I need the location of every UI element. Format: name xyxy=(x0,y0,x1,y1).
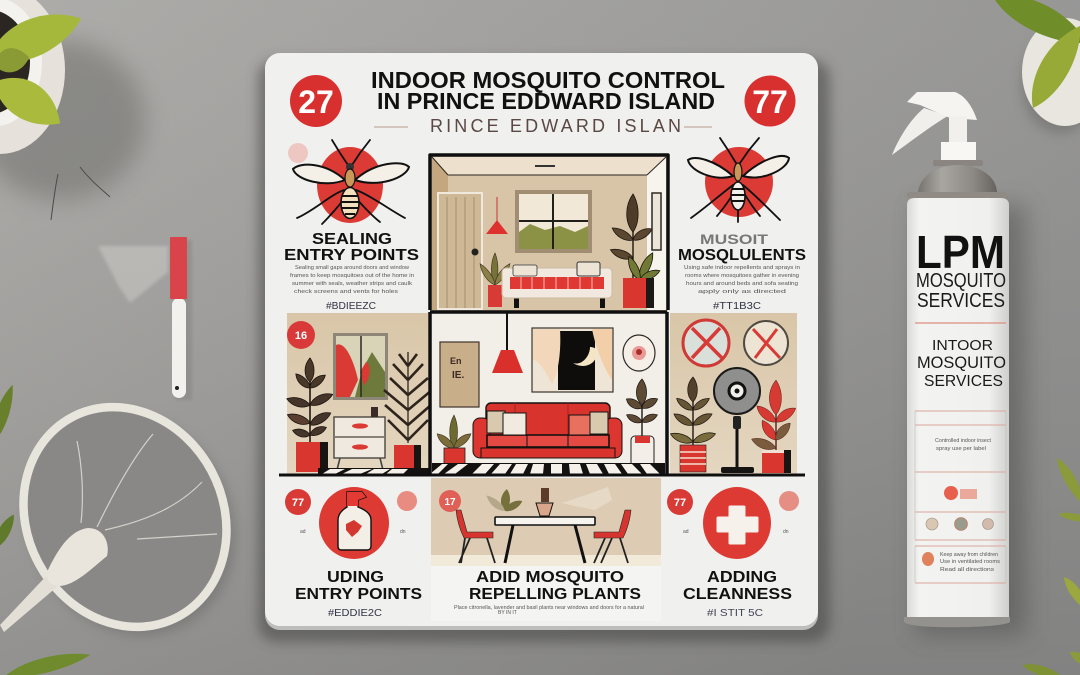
wall shadow behind top left pot xyxy=(0,40,145,200)
panel: bottom left repellent bottle: ad xyxy=(300,529,306,535)
faded dot xyxy=(288,143,308,163)
product text xyxy=(917,337,1006,390)
badge xyxy=(439,490,461,512)
text block: adding cleanness: #I STIT 5C xyxy=(707,608,763,619)
can fine print: spray use per label xyxy=(936,446,986,452)
round icons xyxy=(926,518,994,530)
poster: En xyxy=(450,356,462,366)
panel: bottom right cleanness: dn xyxy=(783,529,789,535)
title xyxy=(371,67,725,114)
text block: adding cleanness: CLEANNESS xyxy=(683,586,792,603)
table with pot xyxy=(495,488,595,563)
subtitle with rules: RINCE EDWARD ISLAN xyxy=(430,116,681,136)
spray mist xyxy=(98,246,168,303)
text block: mosquito repellents: #TT1B3C xyxy=(713,301,761,312)
leafy plant with striped pot xyxy=(669,377,717,472)
product text: SERVICES xyxy=(924,373,1003,390)
brand text xyxy=(916,226,1006,312)
plant pot top left xyxy=(0,0,88,154)
product text: MOSQUITO xyxy=(917,353,1006,372)
poster card xyxy=(258,53,830,642)
brand text: LPM xyxy=(916,226,1005,278)
icon: mosquito left xyxy=(293,140,409,224)
wall sketch xyxy=(562,487,612,510)
faded badge xyxy=(779,491,799,511)
panel: right lower room xyxy=(669,313,798,474)
text block: add mosquito repelling plants: ADID MOSQUITO xyxy=(476,569,624,586)
number badge left xyxy=(290,75,342,127)
framed picture xyxy=(652,193,661,250)
product text: INTOOR xyxy=(932,337,993,354)
ceiling xyxy=(432,157,666,175)
text block: sealing entry points: SEALING xyxy=(312,231,392,248)
wall plate xyxy=(623,335,655,371)
bottom rim xyxy=(904,617,1010,627)
plant xyxy=(286,358,334,472)
text block: sealing entry points: check screens and vents for holes xyxy=(294,289,399,295)
plant pot top right xyxy=(987,0,1080,133)
dresser xyxy=(334,407,385,470)
panel: upper room illustration xyxy=(430,155,668,312)
panel: bottom right cleanness xyxy=(667,487,799,559)
bottom label panel: Keep away from children xyxy=(940,552,998,558)
text block: mosquito repellents: apply only as directed xyxy=(698,289,786,295)
text block: mosquito repellents: MOSQLULENTS xyxy=(678,247,806,264)
brand text: MOSQUITO xyxy=(916,270,1006,292)
text block: sealing entry points: Sealing small gaps around doors and window xyxy=(295,265,409,271)
can label details xyxy=(915,411,1006,583)
door xyxy=(438,193,482,309)
text block: mosquito repellents: hours and around beds and sofa seating xyxy=(686,281,798,287)
bottom label panel: Read all directions xyxy=(940,567,995,573)
big plant xyxy=(609,194,661,308)
potted plant right xyxy=(624,379,659,467)
text block: sealing entry points: summer with seals, weather strips and caulk xyxy=(292,281,413,287)
red seal xyxy=(944,486,977,500)
panel: bottom centre dining scene xyxy=(431,478,661,621)
right chair xyxy=(594,510,631,563)
pendant lamp xyxy=(492,312,523,373)
text block: uding entry points: #EDDIE2C xyxy=(328,608,382,619)
wall lamp xyxy=(486,197,508,234)
icon: mosquito right xyxy=(688,138,789,222)
fly swatter xyxy=(0,371,273,672)
poster xyxy=(440,342,479,407)
title: IN PRINCE EDDWARD ISLAND xyxy=(377,88,715,114)
can fine print xyxy=(935,438,992,452)
text block: add mosquito repelling plants: BY IN IT xyxy=(498,610,517,616)
no-mosquito sign 2 xyxy=(744,321,788,365)
small plant xyxy=(477,253,512,307)
sofa xyxy=(502,262,612,308)
badge: 77 xyxy=(674,497,686,509)
panel: bottom left repellent bottle xyxy=(285,487,417,559)
text block: add mosquito repelling plants: Place citronella, lavender and basil plants near windows and doors for a natural xyxy=(454,605,644,611)
number badge left: 27 xyxy=(298,84,334,120)
panel: centre lower room xyxy=(430,312,667,474)
text block: mosquito repellents: rooms where mosquitoes gather in evening xyxy=(685,273,799,279)
night window with curtains xyxy=(532,328,613,392)
text block: sealing entry points: #BDIEEZC xyxy=(326,301,376,312)
text block: uding entry points xyxy=(295,569,422,619)
text block: sealing entry points: ENTRY POINTS xyxy=(284,247,419,264)
window xyxy=(515,190,592,253)
spray can xyxy=(892,92,1026,635)
badge: 17 xyxy=(444,497,456,508)
can fine print: Controlled indoor insect xyxy=(935,438,992,444)
text block: add mosquito repelling plants xyxy=(454,569,644,616)
text block: mosquito repellents: MUSOIT xyxy=(700,231,769,247)
floor line xyxy=(279,474,805,476)
left edge leaves xyxy=(0,383,92,675)
text block: uding entry points: ENTRY POINTS xyxy=(295,586,422,603)
dome xyxy=(907,160,1007,198)
text block: mosquito repellents: Using safe indoor repellents and sprays in xyxy=(684,265,800,271)
panel: left lower room xyxy=(286,313,432,474)
striped rug xyxy=(430,463,665,474)
standing fan xyxy=(714,368,760,473)
right edge leaves xyxy=(1021,455,1080,675)
faded badge xyxy=(397,491,417,511)
text block: mosquito repellents xyxy=(678,231,806,312)
number badge right xyxy=(744,76,796,126)
badge 16 xyxy=(287,321,315,349)
number badge right: 77 xyxy=(752,84,788,120)
window xyxy=(333,333,388,400)
text block: uding entry points: UDING xyxy=(327,569,384,586)
red plant xyxy=(750,380,798,473)
red sofa xyxy=(473,403,622,458)
red and white pen xyxy=(170,237,192,400)
feather plant xyxy=(384,352,432,472)
rug stripes xyxy=(318,468,430,474)
text block: adding cleanness: ADDING xyxy=(707,569,777,586)
nozzle xyxy=(892,92,977,161)
loose antenna hair xyxy=(51,167,110,220)
text block: add mosquito repelling plants: REPELLING PLANTS xyxy=(469,586,641,603)
small plant xyxy=(435,415,473,467)
icon: bottle in circle xyxy=(319,487,389,559)
bottom label panel: Use in ventilated rooms xyxy=(940,559,1001,565)
text block: sealing entry points: frames to keep mosquitoes out of the home in xyxy=(290,273,414,279)
left chair xyxy=(456,510,495,563)
panel: bottom right cleanness: ad xyxy=(683,529,689,535)
badge 16: 16 xyxy=(295,330,307,342)
text block: sealing entry points xyxy=(284,231,419,312)
plant on wall xyxy=(484,489,524,514)
badge: 77 xyxy=(292,497,304,509)
brand text: SERVICES xyxy=(917,290,1005,312)
icon: cross in circle xyxy=(703,487,771,559)
text block: adding cleanness xyxy=(683,569,792,619)
title: INDOOR MOSQUITO CONTROL xyxy=(371,67,725,93)
panel: bottom left repellent bottle: dn xyxy=(400,529,406,535)
bottom label panel xyxy=(922,552,1001,573)
no-mosquito sign 1 xyxy=(683,320,729,366)
can body xyxy=(907,198,1009,618)
poster: IE. xyxy=(452,370,464,381)
